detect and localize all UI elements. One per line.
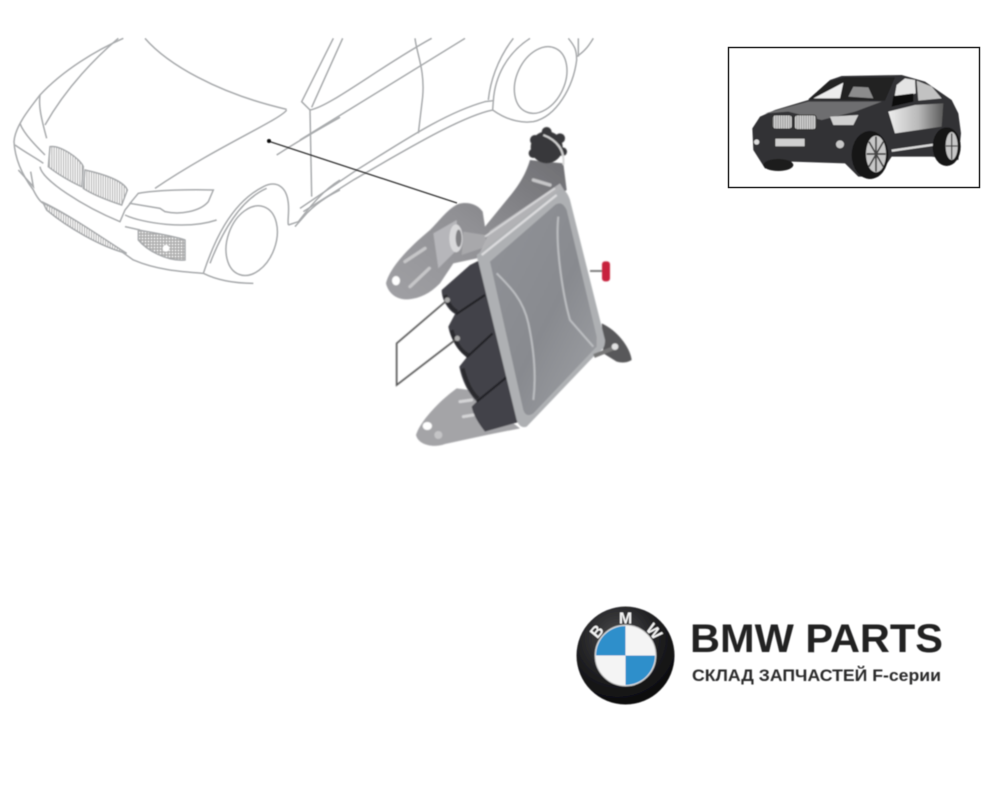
front wheel [852, 131, 888, 179]
front left tire [763, 159, 793, 171]
grille right [83, 170, 127, 205]
car photo illustration [752, 75, 961, 179]
mounting bolt [449, 224, 487, 255]
outer black ring [576, 606, 674, 704]
housing highlight [482, 195, 557, 255]
grille left [48, 147, 83, 187]
car door and rear wheel [300, 38, 593, 212]
brand title: BMW PARTS [690, 617, 943, 661]
grille right [794, 115, 816, 130]
car hood and front left [14, 38, 340, 283]
mirror [892, 93, 913, 107]
red fastener [590, 261, 610, 281]
right screw [594, 347, 617, 356]
BMW roundel logo [576, 606, 674, 704]
knob [529, 127, 567, 165]
hood [765, 102, 882, 120]
windshield [808, 77, 895, 101]
sill [892, 144, 938, 151]
module lid [490, 203, 597, 415]
module housing [477, 189, 605, 427]
white rim [595, 625, 656, 686]
thumbnail frame with car photo [728, 48, 980, 188]
line drawing: car front outline [14, 38, 593, 283]
ring letters: B [587, 622, 608, 642]
blue quarters [596, 626, 626, 656]
door reflection [888, 103, 943, 133]
right bracket ear [602, 323, 632, 362]
ring letters: W [642, 621, 665, 644]
lower air intake [43, 203, 127, 253]
headlight [830, 115, 858, 125]
wire harness [397, 300, 457, 385]
control module assembly [386, 127, 632, 446]
side window [894, 78, 916, 100]
lower bracket [416, 388, 520, 446]
connector blocks [442, 260, 520, 432]
ring letters [587, 610, 665, 644]
body [752, 75, 961, 177]
brand subtitle: СКЛАД ЗАПЧАСТЕЙ F-серии [692, 666, 941, 685]
rear wheel [933, 127, 961, 166]
grille left [772, 115, 792, 129]
ring letters: M [619, 610, 632, 628]
fog lamps [836, 140, 844, 148]
leader line from car to module [267, 139, 457, 203]
bracket slots and hole [405, 180, 550, 287]
housing rim [477, 183, 570, 260]
rear window [917, 81, 942, 101]
fog lamp [138, 230, 185, 260]
mounting bracket [386, 160, 567, 299]
bracket centre plate [433, 220, 458, 268]
plate [775, 138, 805, 147]
lid embossing [497, 217, 593, 400]
